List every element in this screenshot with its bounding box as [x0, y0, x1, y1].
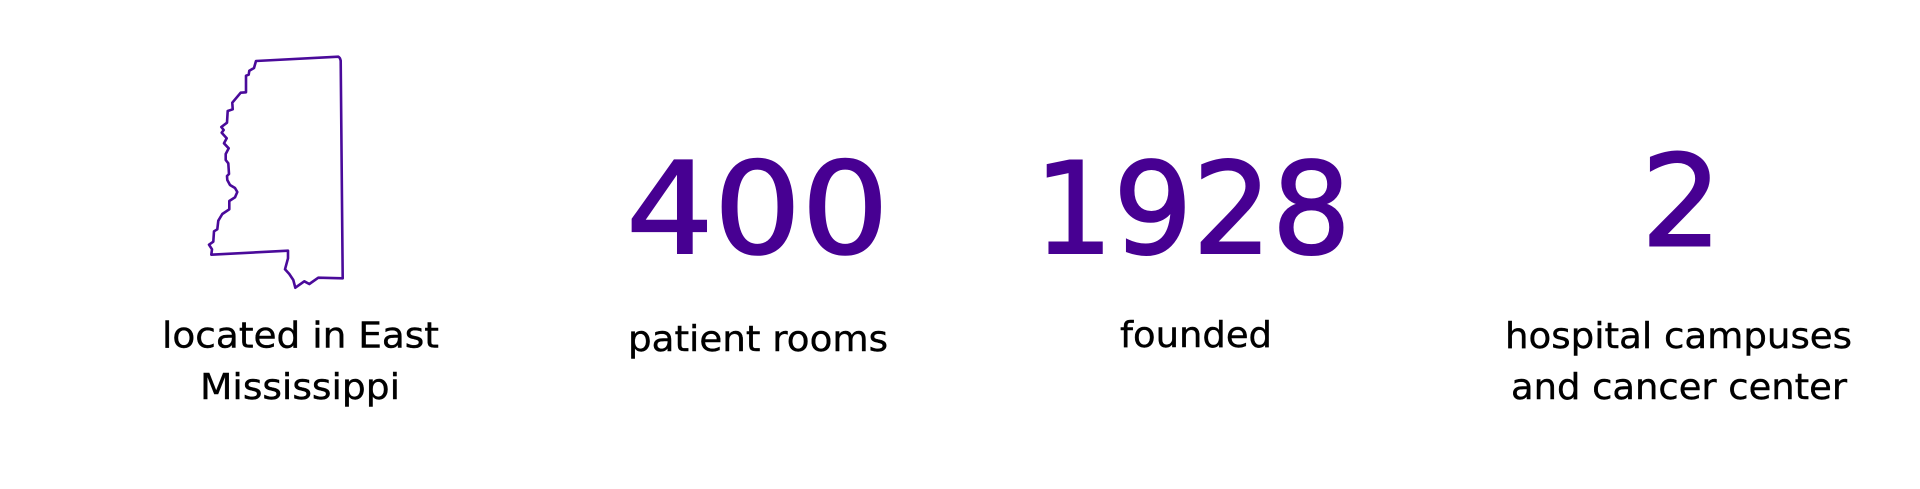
label: patient rooms: patient rooms [628, 319, 888, 360]
panel: patient rooms [626, 135, 889, 360]
panel: founded [1034, 135, 1351, 356]
label: hospital campuses and cancer center: and cancer center [1511, 367, 1847, 408]
label: located in East Mississippi: located in East [162, 316, 439, 356]
number: 400: 400 [626, 135, 889, 283]
number: 1928: 1928 [1034, 135, 1351, 283]
number: 2: 2 [1641, 128, 1722, 276]
label: hospital campuses and cancer center: hospital campuses [1505, 316, 1852, 357]
panel: hospital campuses [1505, 128, 1852, 408]
panel: location [162, 57, 439, 408]
label: founded: founded [1120, 315, 1272, 356]
label: located in East Mississippi: Mississippi [200, 367, 400, 408]
icon: Mississippi state outline [209, 57, 343, 288]
